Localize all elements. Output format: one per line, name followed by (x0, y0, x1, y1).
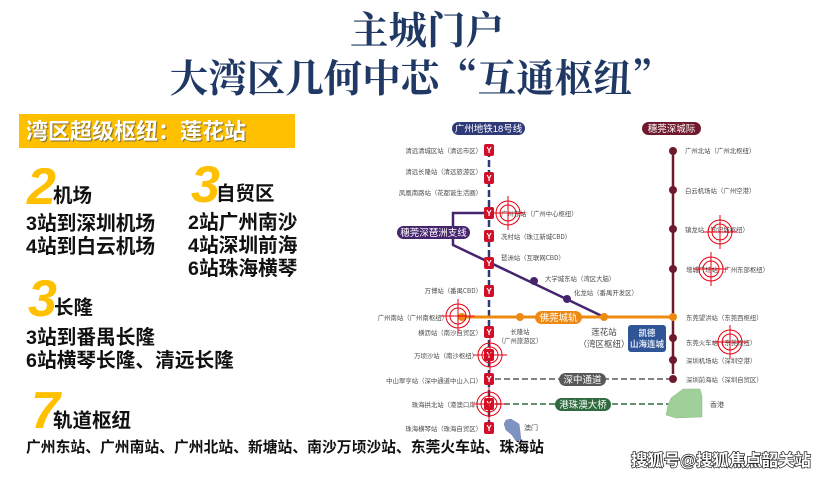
line: Guangzhou Metro 18: 广州地铁18号线 (455, 123, 523, 135)
station labels: right of Line 18: （广州旅游区） (498, 336, 542, 345)
station labels: right of Line 18: 大学城东站（湾区大脑） (545, 274, 615, 283)
station labels: right of Line 18: 广州东站（广州中心枢纽） (501, 209, 578, 218)
line: Suiguan-Shenzhen intercity (642, 122, 701, 379)
title: 主城门户 (350, 1, 504, 56)
text block: 3 Chimelong: 长隆 (54, 296, 94, 319)
text block: 3 free trade zones (188, 156, 298, 280)
text block: 2 airports: 2 (26, 158, 56, 216)
shape: Macau (504, 419, 538, 441)
station labels: left of Line 18: 万博站（番禺CBD） (425, 286, 482, 295)
station labels: right of Line 18: 长隆站 (510, 327, 530, 336)
card: CapitaLand (628, 325, 666, 352)
station labels: intercity: 东莞火车站（东莞枢纽） (686, 338, 756, 347)
shape: Macau: 澳门 (524, 423, 538, 433)
line: Foguan intercity (458, 311, 677, 324)
station labels: intercity: 东莞望洪站（东莞西枢纽） (686, 313, 763, 322)
title (170, 1, 670, 104)
line: Suiguan-Shenzhen intercity: 穗莞深城际 (648, 123, 696, 135)
text block: 3 free trade zones: 3 (191, 156, 220, 214)
station labels: left of Line 18: 清远清城区站（清远市区） (405, 146, 482, 155)
text block: 7 rail hubs: 7 (31, 382, 62, 440)
line: Pazhou branch: 穗莞深琶洲支线 (400, 227, 467, 239)
station labels: left of Line 18: 珠海拱北站（港澳口岸） (412, 400, 482, 409)
text block: 3 Chimelong: 3 (28, 270, 57, 328)
card: CapitaLand: 山海连城 (630, 339, 664, 349)
station labels: right of Line 18: 琶洲站（互联网CBD） (501, 253, 565, 262)
shape: Hong Kong: 香港 (710, 400, 724, 410)
stations: Line 18 markers (484, 144, 494, 434)
stations: intercity markers (669, 147, 677, 383)
text block: 3 Chimelong (26, 270, 234, 372)
text block: 3 free trade zones: 自贸区 (216, 183, 275, 205)
text block: 7 rail hubs: 轨道枢纽 (53, 409, 131, 432)
banner: 湾区超级枢纽: 湾区超级枢纽：莲花站 (26, 114, 246, 146)
station labels: intercity (685, 146, 769, 384)
card: CapitaLand: 凯德 (638, 328, 656, 338)
text block: 7 rail hubs (26, 382, 544, 456)
station labels: left of Line 18 (378, 146, 482, 433)
station labels: left of Line 18: 横沥站（南沙自贸区） (418, 328, 482, 337)
line: HZM bridge: 港珠澳大桥 (559, 399, 607, 411)
station labels: right of Line 18: 莲花站 (591, 327, 617, 337)
text block: 2 airports: 机场 (53, 185, 92, 207)
text block: 3 Chimelong: 3站到番禺长隆 (26, 326, 155, 349)
station labels: intercity: 镇龙站（知识城枢纽） (685, 225, 749, 234)
station labels: intercity: 白云机场站（广州空港） (685, 186, 755, 195)
line: Guangzhou Metro 18 (452, 122, 525, 428)
station labels: left of Line 18: 广州南站（广州南枢纽） (378, 313, 448, 322)
line: Shenzhong link: 深中通道 (563, 374, 602, 386)
shape: Hong Kong (666, 389, 724, 418)
title: 大湾区几何中芯“互通枢纽” (170, 49, 670, 104)
line: Shenzhong link (495, 373, 673, 386)
station labels: left of Line 18: 清远长隆站（清远旅游区） (405, 167, 482, 176)
target markers (441, 196, 747, 421)
station labels: left of Line 18: 万顷沙站（南沙枢纽） (414, 351, 478, 360)
station labels: left of Line 18: 珠海横琴站（珠海自贸区） (405, 424, 482, 433)
station labels: intercity: 深圳前海站（深圳自贸区） (686, 375, 763, 384)
station labels: right of Line 18: 化龙站（番禺开发区） (574, 288, 638, 297)
text block: 7 rail hubs: 广州东站、广州南站、广州北站、新塘站、南沙万顷沙站、东莞火车站、珠海站 (26, 438, 544, 456)
line: Pazhou branch (397, 213, 604, 317)
station labels: intercity: 增城广场站（广州东部枢纽） (686, 265, 769, 274)
station labels: left of Line 18: 中山翠亨站（深中通道中山入口） (386, 376, 482, 385)
text block: 3 free trade zones: 6站珠海横琴 (188, 258, 298, 280)
station labels: right of Line 18: （湾区枢纽） (578, 338, 630, 350)
station labels: intercity: 广州北站（广州北枢纽） (685, 146, 755, 155)
watermark: 搜狐号@搜狐焦点韶关站 (631, 451, 811, 470)
transit map (378, 122, 769, 441)
station labels: right of Line 18 (498, 209, 638, 350)
station labels: left of Line 18: 凤凰南路站（花都诞生活圈） (399, 188, 482, 197)
station labels: right of Line 18: 冼村站（珠江新城CBD） (501, 232, 571, 241)
text block: 2 airports (26, 158, 155, 258)
text block: 3 Chimelong: 6站横琴长隆、清远长隆 (26, 349, 234, 372)
text block: 3 free trade zones: 2站广州南沙 (188, 212, 298, 234)
station labels: intercity: 深圳机场站（深圳空港） (686, 356, 756, 365)
text block: 3 free trade zones: 4站深圳前海 (188, 235, 298, 257)
line: Foguan intercity: 佛莞城轨 (539, 312, 578, 324)
text block: 2 airports: 3站到深圳机场 (26, 213, 155, 235)
text block: 2 airports: 4站到白云机场 (26, 236, 155, 258)
line: HZM bridge (495, 398, 670, 411)
